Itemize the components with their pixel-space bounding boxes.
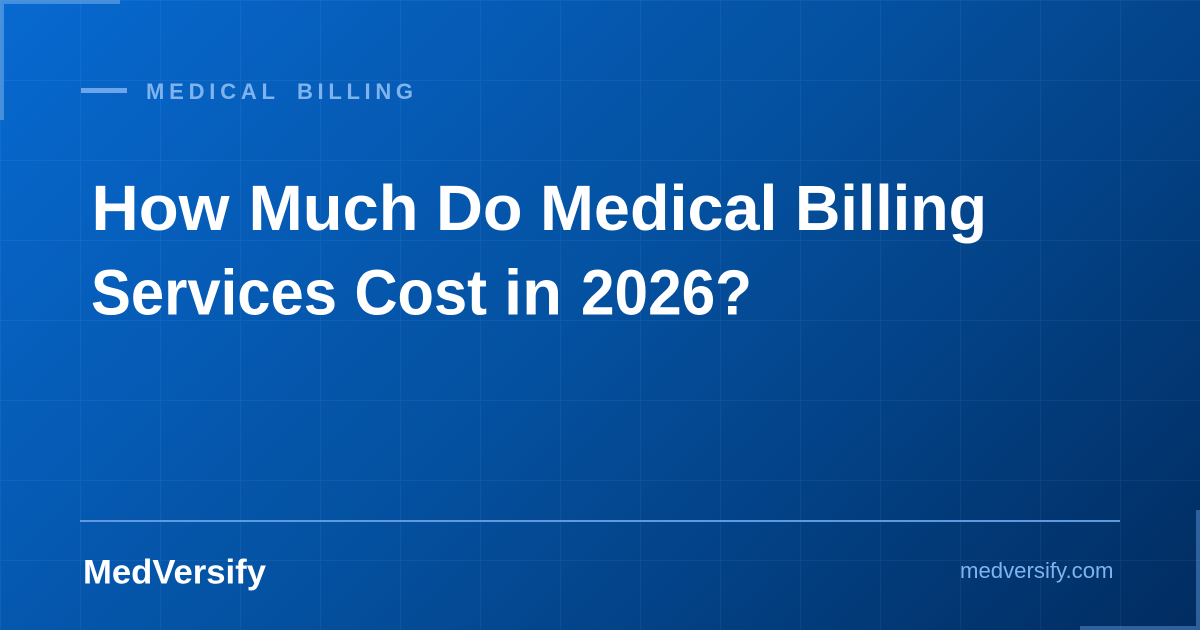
corner accent: bottom-right xyxy=(1080,510,1200,630)
title: 2026? xyxy=(581,256,752,328)
eyebrow label: MEDICAL xyxy=(146,79,275,104)
corner accent: top-left xyxy=(0,0,120,120)
title: Cost xyxy=(354,256,487,328)
title xyxy=(91,172,987,328)
title: in xyxy=(504,256,562,328)
title: Billing xyxy=(795,172,987,244)
title: Much xyxy=(248,172,418,244)
title: Medical xyxy=(540,172,778,244)
brand name: MedVersify xyxy=(83,554,266,592)
footer divider xyxy=(80,520,1120,522)
title: Do xyxy=(436,172,522,244)
eyebrow dash xyxy=(81,88,127,93)
website url: medversify.com xyxy=(960,558,1114,583)
eyebrow label: BILLING xyxy=(297,79,413,104)
title: How xyxy=(92,172,230,244)
title: Services xyxy=(91,256,337,328)
